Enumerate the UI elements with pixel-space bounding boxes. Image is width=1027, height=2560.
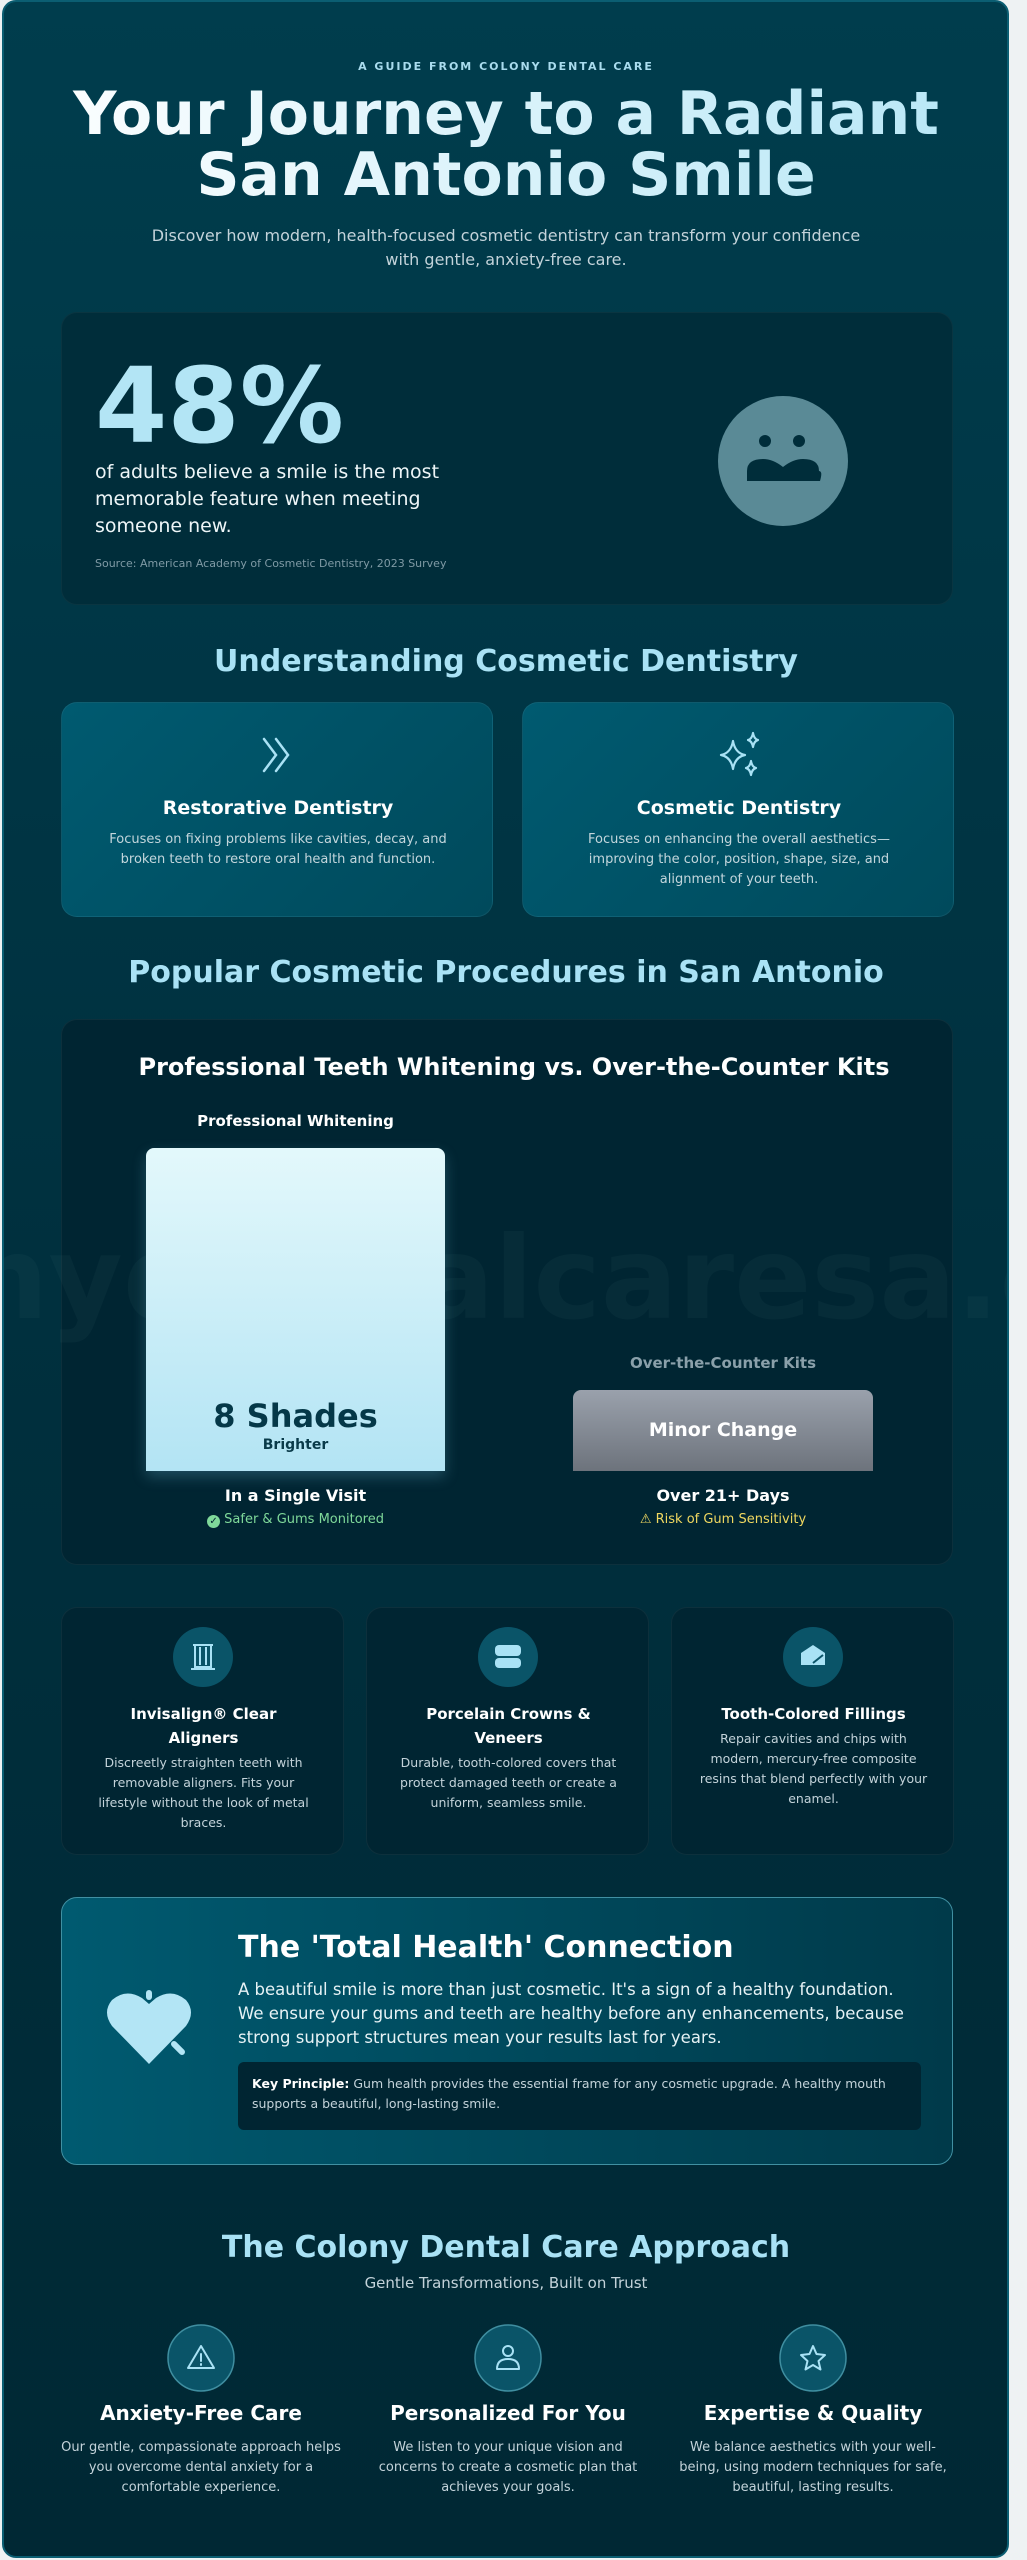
text: A beautiful smile is more than just cosmetic. It's a sign of a healthy foundation. We ensure your gums and teeth are healthy before any enhancements, because strong support structures mean your results last for years. (238, 1980, 904, 2047)
title: Invisalign® Clear Aligners (130, 1705, 276, 1747)
bar: over-the-counter (573, 1354, 873, 1527)
icon: chevrons (262, 738, 290, 772)
callout: key principle (238, 2062, 921, 2130)
text: Discreetly straighten teeth with removable aligners. Fits your lifestyle without the look of metal braces. (98, 1755, 309, 1830)
text: We listen to your unique vision and concerns to create a cosmetic plan that achieves your goals. (379, 2440, 637, 2495)
text: Durable, tooth-colored covers that protect damaged teeth or create a uniform, seamless smile. (400, 1755, 617, 1810)
eyebrow label: A GUIDE FROM COLONY DENTAL CARE (358, 60, 654, 73)
bar: over-the-counter: Over 21+ Days (656, 1486, 790, 1505)
panel: cosmetic (522, 702, 954, 917)
panel: crowns (366, 1607, 649, 1855)
panel: fillings (671, 1607, 954, 1855)
text: Our gentle, compassionate approach helps you overcome dental anxiety for a comfortable experience. (61, 2440, 341, 2495)
title: Porcelain Crowns & Veneers (426, 1705, 591, 1747)
icon: aligner (173, 1627, 233, 1687)
title (4, 84, 1008, 206)
text: Focuses on enhancing the overall aesthetics—improving the color, position, shape, size, and alignment of your teeth. (588, 832, 890, 887)
icon: heart (107, 1990, 191, 2064)
feature: anxiety-free (61, 2324, 341, 2495)
title: San Antonio Smile (196, 140, 816, 210)
icon: sparkles (720, 732, 760, 776)
panel: stat 48% (61, 312, 953, 605)
bar: professional: 8 Shades (213, 1397, 378, 1435)
text: We balance aesthetics with your well-being, using modern techniques for safe, beautiful, lasting results. (679, 2440, 947, 2495)
icon: crowns (478, 1627, 538, 1687)
heading: understanding: Understanding Cosmetic Dentistry (214, 644, 798, 679)
text: Repair cavities and chips with modern, mercury-free composite resins that blend perfectly with your enamel. (700, 1731, 927, 1806)
icon: warning (167, 2324, 235, 2392)
stat text: of adults believe a smile is the most memorable feature when meeting someone new. (95, 461, 439, 537)
title: Cosmetic Dentistry (637, 797, 841, 819)
panel: total health (61, 1897, 953, 2165)
heading: popular procedures: Popular Cosmetic Procedures in San Antonio (128, 955, 884, 990)
bar: professional: Safer & Gums Monitored (224, 1512, 384, 1527)
icon: smile face (718, 396, 848, 526)
bar: over-the-counter: Minor Change (649, 1419, 797, 1441)
bar: over-the-counter: ⚠ Risk of Gum Sensitivity (640, 1512, 806, 1527)
heading: approach: The Colony Dental Care Approach (222, 2230, 790, 2265)
bar: professional: ✓ (209, 1516, 218, 1527)
bar: professional: In a Single Visit (225, 1486, 366, 1505)
icon: person (474, 2324, 542, 2392)
title: Your Journey to a Radiant (73, 79, 939, 149)
chart title: Professional Teeth Whitening vs. Over-the-Counter Kits (138, 1053, 890, 1081)
stat number: 48% (95, 345, 344, 467)
icon: star (779, 2324, 847, 2392)
panel: invisalign (61, 1607, 344, 1855)
title: Tooth-Colored Fillings (721, 1705, 906, 1723)
bar: professional: Professional Whitening (197, 1112, 394, 1130)
source: Source: American Academy of Cosmetic Dentistry, 2023 Survey (95, 557, 446, 570)
title: The 'Total Health' Connection (238, 1930, 734, 1965)
title: Personalized For You (390, 2401, 626, 2425)
subheading: Gentle Transformations, Built on Trust (365, 2274, 647, 2292)
feature: expertise (679, 2324, 947, 2495)
title: Restorative Dentistry (163, 797, 393, 819)
bar: professional (140, 1112, 450, 1528)
text: Focuses on fixing problems like cavities, decay, and broken teeth to restore oral health and function. (109, 832, 447, 867)
panel: whitening chart (61, 1019, 953, 1565)
feature: personalized (379, 2324, 637, 2495)
icon: filling (783, 1627, 843, 1687)
panel: restorative (61, 702, 493, 917)
subtitle: Discover how modern, health-focused cosmetic dentistry can transform your confidence with gentle, anxiety-free care. (152, 226, 860, 269)
title: Anxiety-Free Care (100, 2401, 302, 2425)
bar: professional: Brighter (263, 1437, 328, 1453)
title: Expertise & Quality (704, 2401, 922, 2425)
callout: key principle: Key Principle: Gum health provides the essential frame for any cosmetic upgrade. A healthy mouth supports a beautiful, long-lasting smile. (252, 2076, 886, 2111)
bar: over-the-counter: Over-the-Counter Kits (630, 1354, 816, 1372)
